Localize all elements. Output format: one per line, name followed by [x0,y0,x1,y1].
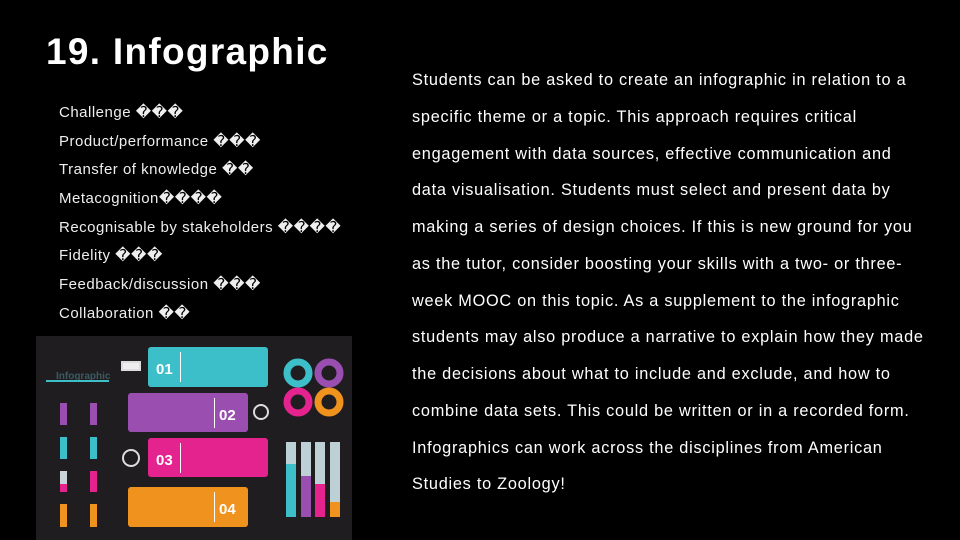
list: criteria: Metacognition���� [59,190,222,207]
banner 02 [128,393,248,432]
text block: description: Students can be asked to create an infographic in relation to a [412,71,906,89]
banner 03 [148,438,268,477]
icons: misc [122,362,268,466]
text block: description: engagement with data sources, effective communication and [412,144,892,162]
text block: description: as the tutor, consider boosting your skills with a two- or three- [412,255,902,273]
list: criteria: Feedback/discussion ��� [59,276,261,293]
text block: description: data visualisation. Students must select and present data by [412,181,891,199]
heading: Infographic: Infographic [56,371,111,382]
donut charts [287,362,340,413]
text block: description: Infographics can work across the disciplines from American [412,438,883,456]
text block: description: making a series of design choices. If this is new ground for you [412,218,912,236]
text block: description: specific theme or a topic. This approach requires critical [412,108,857,126]
banner 04: 04 [219,501,236,518]
banner 01 [148,347,268,387]
text block: description: the decisions about what to include and exclude, and how to [412,365,891,383]
text block: description: students may also produce a narrative to explain how they made [412,328,924,346]
people icons [60,403,97,527]
list: criteria: Product/performance ��� [59,133,261,150]
text block: description: week MOOC on this topic. As a supplement to the infographic [412,292,900,310]
banner 01: 01 [156,361,173,378]
bar chart [286,442,340,517]
list: criteria: Challenge ��� [59,104,183,121]
list: criteria [59,103,341,322]
banner 02: 02 [219,407,236,424]
title: 19. Infographic [46,31,329,72]
list: criteria: Fidelity ��� [59,247,163,264]
text block: description: combine data sets. This could be written or in a recorded form. [412,402,910,420]
list: criteria: Recognisable by stakeholders ���� [59,219,341,236]
text block: description: Studies to Zoology! [412,475,566,493]
banner 03: 03 [156,452,173,469]
banner 04 [128,487,248,527]
image: sample infographic [36,336,352,540]
list: criteria: Collaboration �� [59,305,190,322]
text block: description [412,71,924,493]
list: criteria: Transfer of knowledge �� [59,161,254,178]
